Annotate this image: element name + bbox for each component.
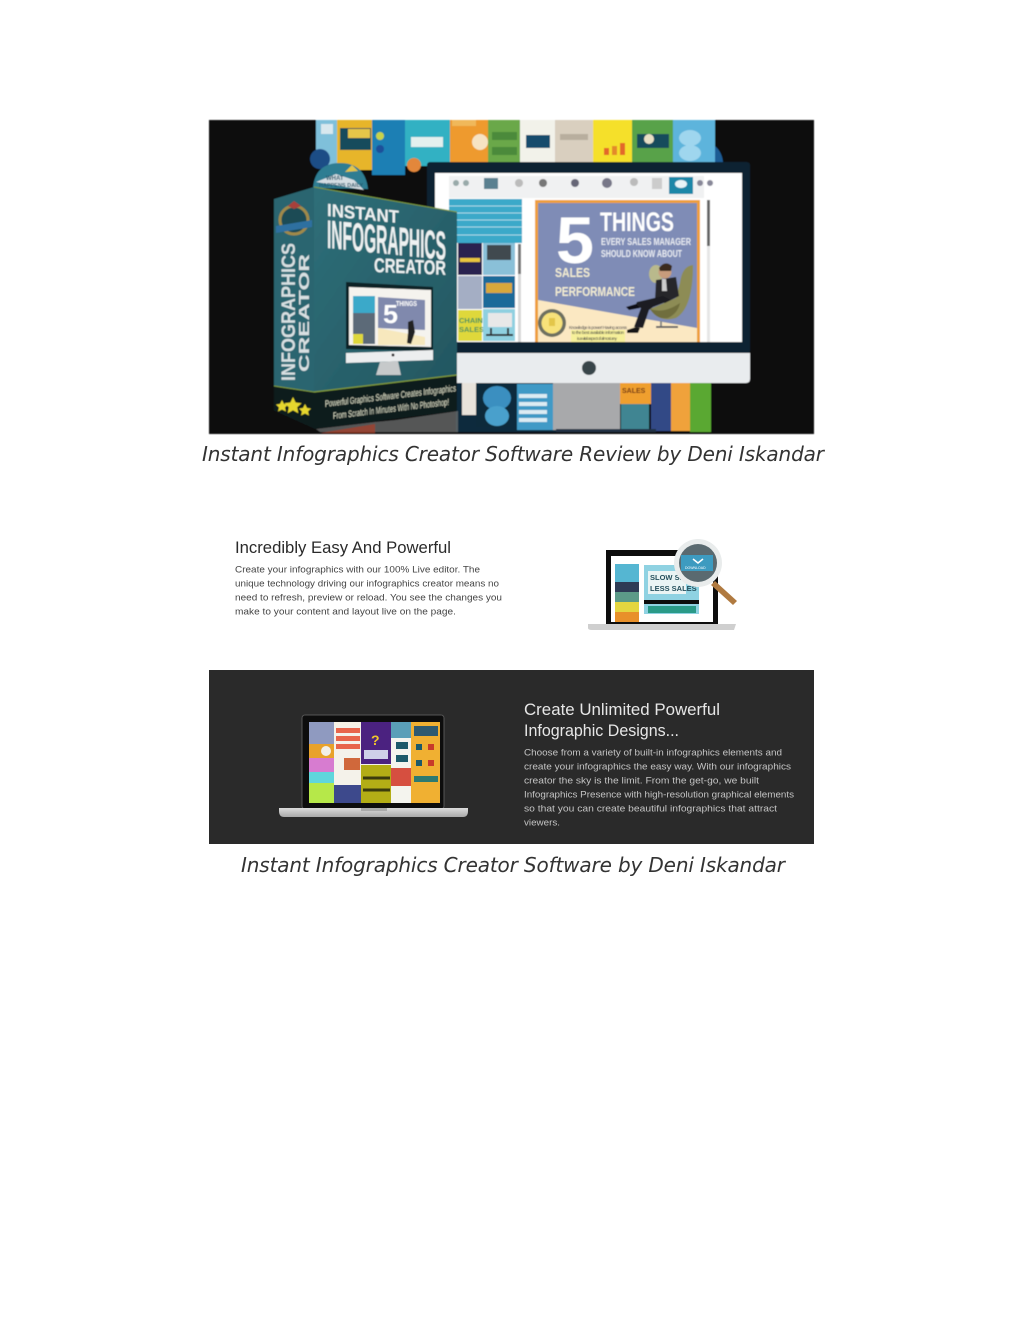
icon: laptop with magnifying glass: LESS SALES: [650, 584, 697, 593]
box front face: [314, 187, 457, 429]
body text: create your infographics the easy way. With our infographics: [524, 762, 791, 772]
caption: second image: Instant Infographics Creator Software by Deni Iskandar: [241, 853, 787, 877]
body text: make to your content and layout live on the page.: [235, 606, 456, 618]
panel: create unlimited powerful infographic designs: [209, 670, 814, 844]
monitor: [427, 162, 750, 383]
infographic posters behind monitor (top row): WHAT: [326, 176, 344, 182]
body text: so that you can create beautiful infographics that attract: [524, 804, 777, 814]
body text: Create your infographics with our 100% Live editor. The: [235, 564, 480, 576]
icon: laptop with magnifying glass: DOWNLOAD: [685, 566, 706, 570]
editor toolbar: [449, 176, 713, 198]
infographic preview: 5 things every sales manager should know: to the best available information: [572, 330, 625, 335]
icon: laptop with magnifying glass: SLOW SI: [650, 573, 682, 582]
body text: viewers.: [524, 818, 560, 828]
infographic preview: 5 things every sales manager should know: [535, 200, 700, 342]
body text: unique technology driving our infographics creator means no: [235, 578, 499, 590]
infographic preview: 5 things every sales manager should know: THINGS: [600, 207, 674, 237]
body text: [524, 748, 794, 828]
infographic posters behind monitor (top row): [310, 120, 723, 190]
infographic preview: 5 things every sales manager should know: is a vital aspect of almost any: [577, 336, 618, 341]
infographic preview: 5 things every sales manager should know: Knowledge is power! Having access: [569, 325, 628, 330]
box title: [327, 200, 446, 280]
box monitor illustration: THINGS: [396, 299, 417, 308]
template thumbnails: [458, 243, 521, 342]
panel: incredibly easy and powerful: [235, 538, 737, 630]
icon: laptop with magnifying glass: [588, 539, 737, 630]
body text: need to refresh, preview or reload. You see the changes you: [235, 592, 502, 604]
box monitor illustration: 5: [383, 299, 398, 329]
heading: Infographic Designs...: [524, 721, 679, 740]
box tagline: [325, 383, 456, 422]
infographic preview: 5 things every sales manager should know: SHOULD KNOW ABOUT: [601, 249, 682, 260]
heading: Create Unlimited Powerful: [524, 700, 720, 719]
body text: Choose from a variety of built-in infographics elements and: [524, 748, 782, 758]
product box: [274, 187, 458, 433]
heading: [524, 700, 720, 740]
box title: INFOGRAPHICS: [327, 212, 446, 269]
box tagline: From Scratch In Minutes With No Photoshop!: [333, 397, 449, 422]
icon: businessman in armchair: [626, 263, 693, 333]
body text: [235, 564, 502, 618]
infographic preview: 5 things every sales manager should know: SALES: [555, 266, 590, 280]
box side face: CREATOR: [296, 254, 313, 372]
box side face: [274, 187, 314, 428]
caption: first image: Instant Infographics Creator Software Review by Deni Iskandar: [202, 442, 826, 466]
icon: laptop with infographic templates: ?: [371, 732, 380, 748]
icon: stars: [276, 397, 311, 416]
box monitor illustration: [346, 282, 433, 375]
infographic posters behind monitor (top row): HAPPENS DAILY: [319, 183, 363, 189]
body text: creator the sky is the limit. From the get-go, we built: [524, 776, 759, 786]
box tagline: Powerful Graphics Software Creates Infographics: [325, 383, 456, 410]
template thumbnails: CHAIN: [459, 316, 483, 325]
box title: CREATOR: [374, 255, 446, 280]
box title: INSTANT: [327, 200, 399, 227]
infographic preview: 5 things every sales manager should know: PERFORMANCE: [555, 285, 635, 299]
infographic preview: 5 things every sales manager should know: 5: [556, 203, 594, 277]
template thumbnails: SALES: [459, 325, 484, 334]
infographic preview: 5 things every sales manager should know: EVERY SALES MANAGER: [601, 237, 692, 248]
body text: Infographics Presence with high-resolution graphical elements: [524, 790, 794, 800]
box side face: INFOGRAPHICS: [279, 243, 300, 381]
editor side menu: [449, 199, 522, 243]
infographic posters below monitor: [456, 383, 711, 432]
heading: Incredibly Easy And Powerful: [235, 538, 451, 557]
icon: laptop with infographic templates: [279, 715, 468, 817]
panel: product box and monitor hero image: [209, 120, 814, 434]
infographic posters below monitor: SALES: [622, 388, 646, 395]
